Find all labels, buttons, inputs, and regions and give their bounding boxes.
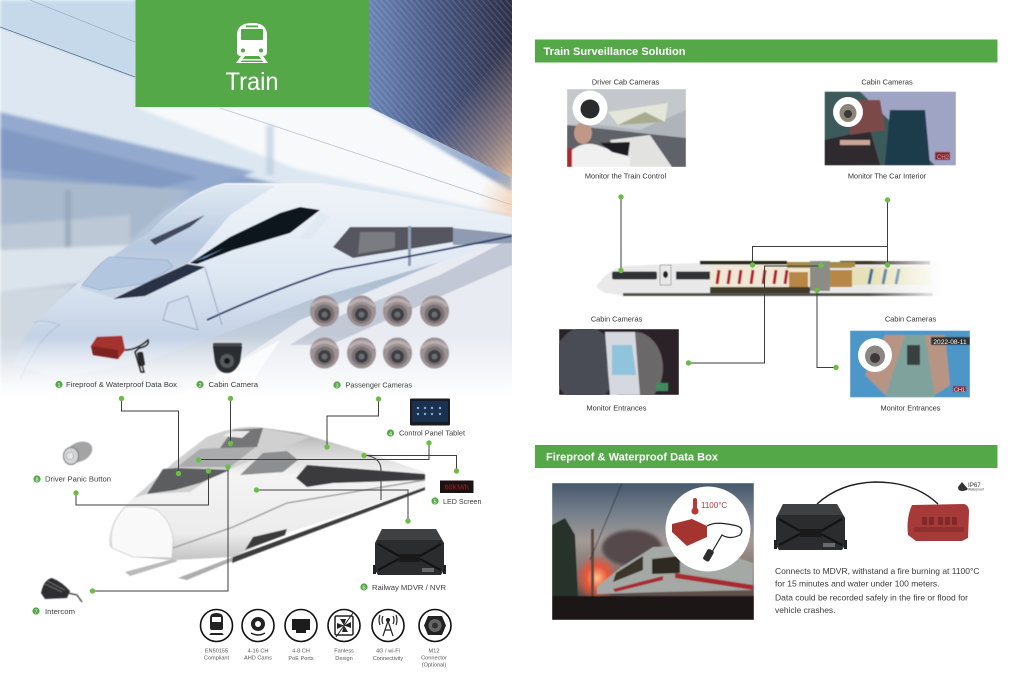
icon: thermometer	[691, 498, 699, 515]
icon: IP67 waterproof	[958, 482, 984, 492]
feature captions: Design	[335, 656, 353, 662]
panel: cabin cameras left entrance: Cabin Cameras	[591, 314, 642, 324]
feature captions: M12	[429, 648, 439, 654]
heading: fireproof and waterproof data box	[535, 445, 998, 468]
panel: cabin cameras right entrance: 2022-08-11	[933, 339, 967, 346]
product labels: Driver Panic Button	[45, 474, 111, 484]
text block: data box description	[775, 567, 980, 615]
icon: control panel tablet	[410, 398, 450, 426]
icon: fireproof data box	[91, 336, 148, 372]
icon: LED screen	[440, 480, 474, 493]
panel: cabin cameras right entrance	[850, 314, 970, 412]
text block: data box description: for 15 minutes and water under 100 meters.	[775, 580, 940, 588]
product labels: 2	[198, 383, 202, 389]
panel: cabin cameras right entrance: Cabin Cameras	[885, 314, 936, 324]
icon: train	[236, 23, 268, 63]
product labels: 7	[34, 609, 38, 615]
feature captions: AHD Cams	[244, 656, 272, 662]
product labels	[32, 380, 482, 616]
icons: passenger dome cameras	[310, 296, 449, 368]
icon: IP67 waterproof: IP67	[968, 482, 981, 489]
icon: PoE port	[292, 619, 310, 633]
panel: cabin cameras left entrance	[553, 314, 679, 412]
text block: data box description: Connects to MDVR, withstand a fire burning at 1100°C	[775, 567, 980, 576]
feature captions: Fanless	[334, 648, 354, 654]
product labels: Cabin Camera	[208, 380, 259, 389]
panel: burning train photo: 1100°C	[701, 501, 727, 510]
product labels: LED Screen	[443, 497, 482, 506]
icon: EN50155 train	[209, 613, 224, 635]
product labels: Passenger Cameras	[346, 380, 412, 389]
panel: cabin cameras interior: Cabin Cameras	[861, 78, 913, 86]
leader dots: product callouts	[73, 396, 459, 594]
panel: cabin cameras interior: Monitor The Car Interior	[848, 172, 927, 180]
illustration: railway MDVR	[373, 529, 446, 575]
feature captions: 4-8 CH	[292, 648, 310, 654]
panel: cabin cameras interior	[824, 78, 956, 180]
product labels: 3	[335, 383, 339, 389]
panel: hero photo background	[0, 0, 512, 382]
feature captions: (Optional)	[422, 662, 446, 668]
panel: train title card	[136, 0, 369, 107]
product labels: Intercom	[45, 607, 75, 616]
panel: burning train photo	[552, 483, 754, 620]
feature captions: Connector	[421, 656, 447, 662]
product labels: Railway MDVR / NVR	[372, 583, 447, 592]
feature captions: 4-16 CH	[248, 648, 268, 654]
feature captions: Connectivity	[373, 656, 403, 662]
product labels: 1	[57, 383, 61, 389]
big train body	[24, 182, 512, 348]
icon: panic button	[62, 437, 96, 467]
product labels: 8	[35, 477, 39, 483]
product labels: Fireproof & Waterproof Data Box	[66, 380, 177, 389]
illustration: grey train	[109, 427, 425, 580]
feature captions	[204, 648, 447, 668]
leader lines: product callouts	[76, 398, 456, 591]
heading: train surveillance solution: Train Surveillance Solution	[544, 46, 686, 58]
panel: driver cab cameras	[567, 78, 686, 180]
product labels: 4	[389, 431, 392, 437]
panel: cabin cameras left entrance: Monitor Entrances	[587, 404, 647, 412]
icon: cabin camera	[213, 343, 242, 373]
icon: fanless	[335, 613, 353, 637]
text block: data box description: Data could be recorded safely in the fire or flood for	[775, 594, 968, 602]
illustration: MDVR connected to data box	[774, 482, 984, 550]
feature captions: PoE Ports	[288, 656, 314, 662]
panel: cabin cameras interior: CH2	[937, 155, 950, 161]
panel: driver cab cameras: Monitor the Train Control	[585, 172, 667, 180]
icon: intercom	[41, 578, 82, 602]
text block: data box description: vehicle crashes.	[775, 606, 836, 615]
heading: train surveillance solution	[535, 40, 998, 62]
panel: driver cab cameras: Driver Cab Cameras	[592, 78, 659, 86]
leader dots: surveillance	[618, 194, 890, 370]
panel: cabin cameras right entrance: CH1	[954, 388, 965, 394]
icon: 4G antenna	[379, 615, 397, 636]
heading: fireproof and waterproof data box: Fireproof & Waterproof Data Box	[546, 452, 719, 464]
feature captions: EN50155	[205, 648, 228, 654]
icon: M12 connector	[424, 616, 446, 635]
product labels: 6	[362, 585, 366, 591]
panel: cabin cameras right entrance: Monitor Entrances	[881, 404, 941, 412]
icon: AHD camera	[251, 617, 265, 635]
product labels: Control Panel Tablet	[399, 428, 466, 438]
icon: IP67 waterproof: Waterproof	[968, 488, 984, 492]
feature captions: Compliant	[204, 656, 230, 662]
icon: LED screen: 60KM/h	[445, 484, 469, 492]
title: Train	[226, 68, 278, 96]
product labels: 5	[433, 499, 437, 505]
leader lines: surveillance	[621, 197, 888, 368]
feature captions: 4G / wi-Fi	[376, 648, 400, 654]
illustration: cutaway train	[596, 255, 944, 300]
feature icons row	[200, 610, 451, 668]
